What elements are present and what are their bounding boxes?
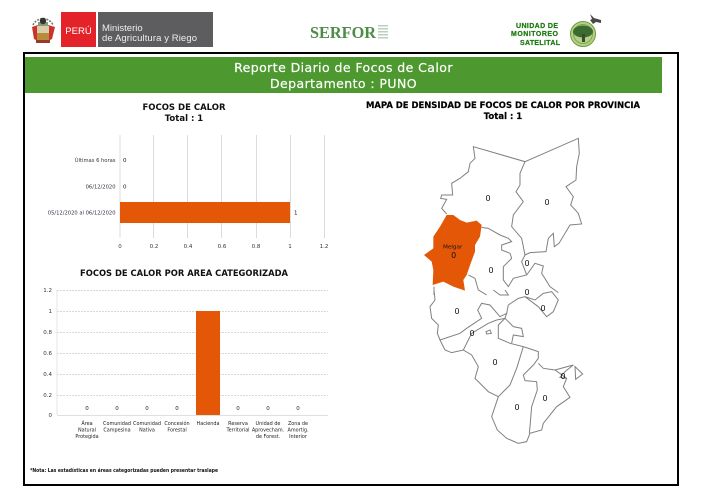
chart: focos de calor horizontal bars: 05/12/2020 al 06/12/2020 [48,210,116,216]
heading: focos por area categorizada: FOCOS DE CALOR POR AREA CATEGORIZADA [80,269,288,279]
province value labels: 0 [540,304,546,313]
logo: Unidad de Monitoreo Satelital: SATELITAL [520,40,561,47]
title banner: Reporte Diario de Focos de Calor [234,60,453,75]
chart: focos de calor horizontal bars: 0 [123,158,127,164]
logo: SERFOR: SERFOR [310,23,377,42]
province value labels: 0 [492,358,498,367]
heading: focos de calor: Total : 1 [165,114,203,124]
province value labels: 0 [485,194,491,203]
title banner [25,57,662,93]
province value labels: 0 [544,198,550,207]
chart: focos por area vertical bars: 0 [236,406,240,412]
chart: focos de calor horizontal bars: 0 [123,184,127,190]
chart: focos por area vertical bars: Forestal [167,428,187,434]
bar: 1 [196,311,220,415]
chart: focos por area vertical bars: 0.8 [43,330,52,336]
province value labels: 0 [542,394,548,403]
chart: focos por area vertical bars: Hacienda [197,421,219,427]
chart: focos de calor horizontal bars: 0.2 [150,244,158,250]
red Peru box [61,12,96,47]
chart: focos de calor horizontal bars: 1.2 [320,244,328,250]
chart: focos de calor horizontal bars: 1 [294,210,298,216]
gray ministry box [98,12,213,47]
chart: focos de calor horizontal bars: 0.4 [184,244,193,250]
chart: focos por area vertical bars: 0 [145,406,149,412]
chart: focos por area vertical bars: 0 [175,406,179,412]
province value labels [454,194,566,412]
chart: focos por area vertical bars: 0 [266,406,270,412]
province value labels: 0 [488,266,494,275]
chart: focos por area vertical bars: Reserva [228,421,248,427]
chart: focos por area vertical bars: 0.4 [43,372,52,378]
chart: focos por area vertical bars: Zona de [288,421,308,427]
province value labels: 0 [514,403,520,412]
title banner: Departamento : PUNO [270,76,417,91]
chart: focos por area vertical bars: Campesina [103,428,131,434]
chart: focos de calor horizontal bars [48,135,328,250]
chart: focos de calor horizontal bars: 06/12/2020 [86,184,116,190]
icon: satellite [590,14,601,24]
heading: mapa de densidad: MAPA DE DENSIDAD DE FOCOS DE CALOR POR PROVINCIA [366,101,640,111]
province boundaries north [434,138,582,295]
chart: focos por area vertical bars: 1 [48,309,52,315]
chart: focos de calor horizontal bars: Últimas 6 horas [75,157,116,164]
chart: focos por area vertical bars: 0 [296,406,300,412]
province value labels: 0 [524,288,530,297]
logo: Peru ministry [32,12,213,47]
icon: national crest [32,18,55,43]
logo: Unidad de Monitoreo Satelital: MONITOREO [511,31,559,38]
province: Melgar highlighted: 0 [451,251,456,260]
chart: focos de calor horizontal bars: 0 [118,244,122,250]
chart: focos por area vertical bars: 0.2 [43,393,52,399]
province value labels: 0 [454,307,460,316]
chart: focos por area vertical bars: Nativa [139,428,155,434]
logo: Peru ministry: de Agricultura y Riego [102,33,197,44]
chart: focos de calor horizontal bars: 1 [288,244,292,250]
chart: focos por area vertical bars: Área [81,420,93,427]
chart: focos por area vertical bars: Comunidad [133,421,161,427]
footnote: *Nota: Las estadísticas en áreas categorizadas pueden presentar traslape [30,467,218,474]
chart: focos por area vertical bars: Protegida [75,434,99,440]
logo: Unidad de Monitoreo Satelital: UNIDAD DE [516,23,558,30]
logo: Peru ministry: Ministerio [102,23,143,34]
chart: focos de calor horizontal bars: 0.8 [252,244,261,250]
bar: 1 [120,202,290,223]
map: provinces of Puno [424,138,583,443]
chart: focos por area vertical bars: 0 [85,406,89,412]
chart: focos por area vertical bars: 1.2 [43,288,52,294]
province value labels: 0 [469,329,475,338]
chart: focos por area vertical bars: Natural [78,428,96,434]
heading: focos de calor [142,103,226,124]
chart: focos de calor horizontal bars: 0.6 [218,244,227,250]
province value labels: 0 [524,259,530,268]
chart: focos por area vertical bars: Aprovecham. [252,428,285,434]
chart: focos por area vertical bars: 0 [115,406,119,412]
chart: focos por area vertical bars: Unidad de [256,421,280,427]
province: Melgar highlighted [424,215,482,291]
chart: focos por area vertical bars: Interior [289,434,308,440]
logo: Unidad de Monitoreo Satelital [511,14,601,47]
icon: globe with tree [570,22,596,46]
province boundaries south [430,290,583,443]
chart: focos por area vertical bars: Amortig. [287,428,309,434]
heading: focos de calor: FOCOS DE CALOR [142,103,226,113]
heading: mapa de densidad [366,101,640,122]
chart: focos por area vertical bars [43,288,328,440]
heading: mapa de densidad: Total : 1 [484,112,522,122]
chart: focos por area vertical bars: 0.6 [43,351,52,357]
chart: focos por area vertical bars: Territorial [225,428,250,434]
province: Melgar highlighted: Melgar [443,245,463,251]
province value labels: 0 [560,372,566,381]
logo: Peru ministry: PERÚ [65,26,92,37]
chart: focos por area vertical bars: Comunidad [103,421,131,427]
chart: focos por area vertical bars: 0 [48,413,52,419]
chart: focos por area vertical bars: de Forest. [256,434,281,440]
chart: focos por area vertical bars: Concesión [164,420,190,427]
